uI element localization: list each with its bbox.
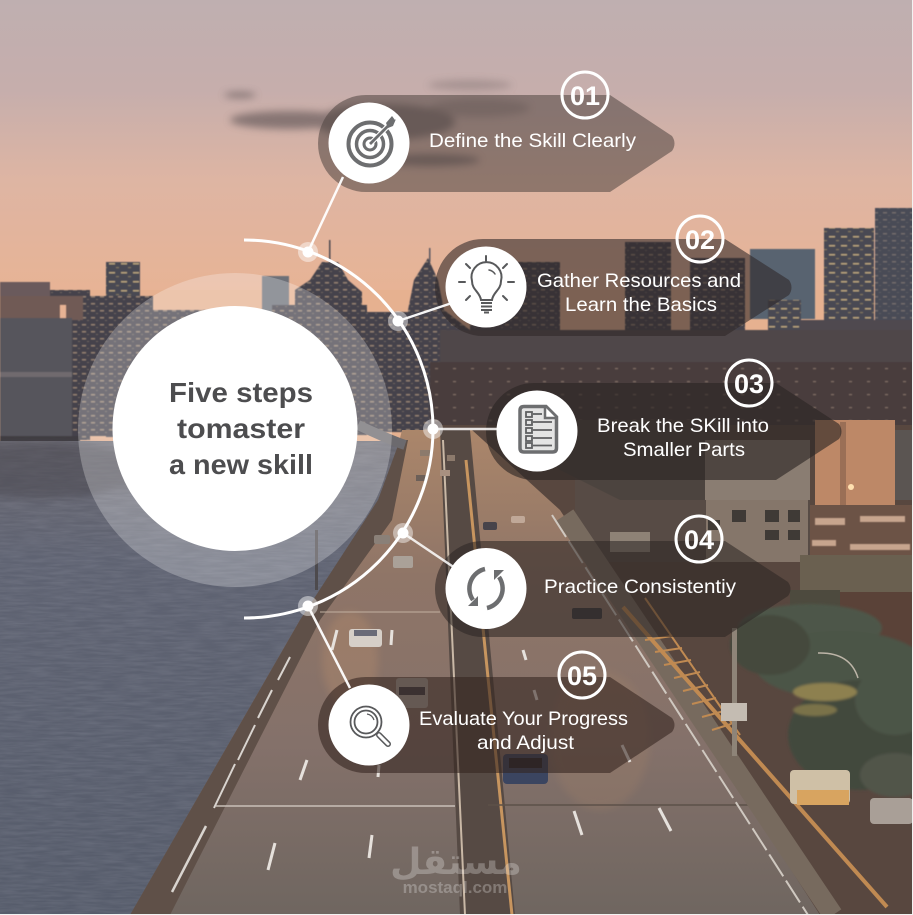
step 1 label: Define the Skill Clearly — [429, 130, 636, 152]
lane marks — [268, 630, 671, 870]
left embankment — [130, 440, 408, 915]
mid buildings — [575, 462, 810, 562]
watermark: mostaql.com — [403, 878, 507, 897]
icon: sync arrows — [446, 548, 526, 629]
number badge 03: 03 — [734, 369, 764, 399]
central halo circle — [78, 273, 392, 587]
step 2 panel — [435, 239, 792, 336]
step 5 panel — [318, 677, 674, 773]
step 4 panel — [435, 541, 790, 637]
trees — [730, 604, 913, 797]
barrier — [565, 515, 833, 915]
central title: a new skill — [169, 449, 313, 480]
step 1 panel — [318, 95, 674, 192]
right side ground — [440, 425, 913, 915]
step 4 label: Practice Consistentiy — [544, 576, 736, 598]
lamp post and sign — [732, 628, 737, 756]
median — [440, 430, 515, 915]
step 3 label — [597, 415, 769, 461]
orange lane paths — [623, 607, 887, 907]
watermark: مستقل — [390, 842, 522, 883]
step 5 label — [419, 708, 628, 754]
icon: magnifier — [328, 684, 410, 766]
central title: Five steps — [169, 377, 313, 408]
road — [130, 430, 820, 915]
step 5 label: and Adjust — [477, 732, 575, 754]
water — [0, 441, 440, 915]
step 3 panel — [486, 383, 842, 480]
number badge 04: 04 — [684, 525, 714, 555]
central title — [112, 306, 358, 551]
arc nodes — [298, 242, 443, 616]
left skyline — [0, 240, 470, 444]
central title: tomaster — [177, 413, 305, 444]
number badge 01: 01 — [570, 81, 600, 111]
icon: checklist document — [496, 390, 578, 472]
left edge white markings — [172, 657, 290, 892]
number badge 02 — [677, 216, 723, 262]
number badge 01 — [562, 72, 608, 118]
step 3 label: Smaller Parts — [623, 439, 745, 461]
number badge 05: 05 — [567, 661, 597, 691]
number badge 03 — [726, 360, 772, 406]
number badge 04 — [676, 516, 722, 562]
icon: light bulb — [446, 246, 526, 328]
step 2 label: Gather Resources and — [537, 270, 741, 292]
step 2 label: Learn the Basics — [565, 294, 717, 316]
icon: target — [328, 102, 410, 184]
seawall near halo — [358, 425, 405, 445]
clouds — [224, 80, 530, 166]
number badge 05 — [559, 652, 605, 698]
right skyline — [430, 208, 913, 432]
cars — [349, 450, 913, 824]
step 3 label: Break the SKill into — [597, 415, 769, 437]
connector lines and arc — [244, 177, 500, 688]
step 2 label — [537, 270, 741, 316]
number badge 02: 02 — [685, 225, 715, 255]
crossing lines — [216, 805, 455, 807]
step 5 label: Evaluate Your Progress — [419, 708, 628, 730]
